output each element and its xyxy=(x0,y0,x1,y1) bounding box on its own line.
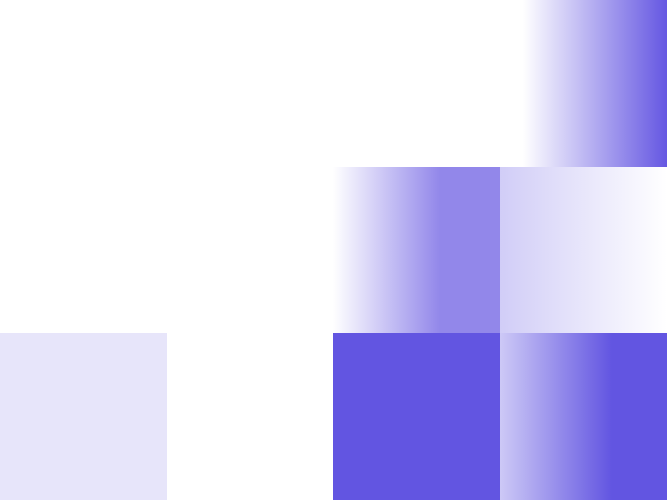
tile: middle-right fading gradient xyxy=(500,166,667,333)
tile: top-right gradient xyxy=(500,0,667,166)
tile: bottom-right gradient xyxy=(500,333,667,500)
tile: bottom-centre solid indigo xyxy=(333,333,500,500)
tile: middle-centre gradient xyxy=(333,166,500,333)
tile: bottom-left pale lavender xyxy=(0,333,167,500)
